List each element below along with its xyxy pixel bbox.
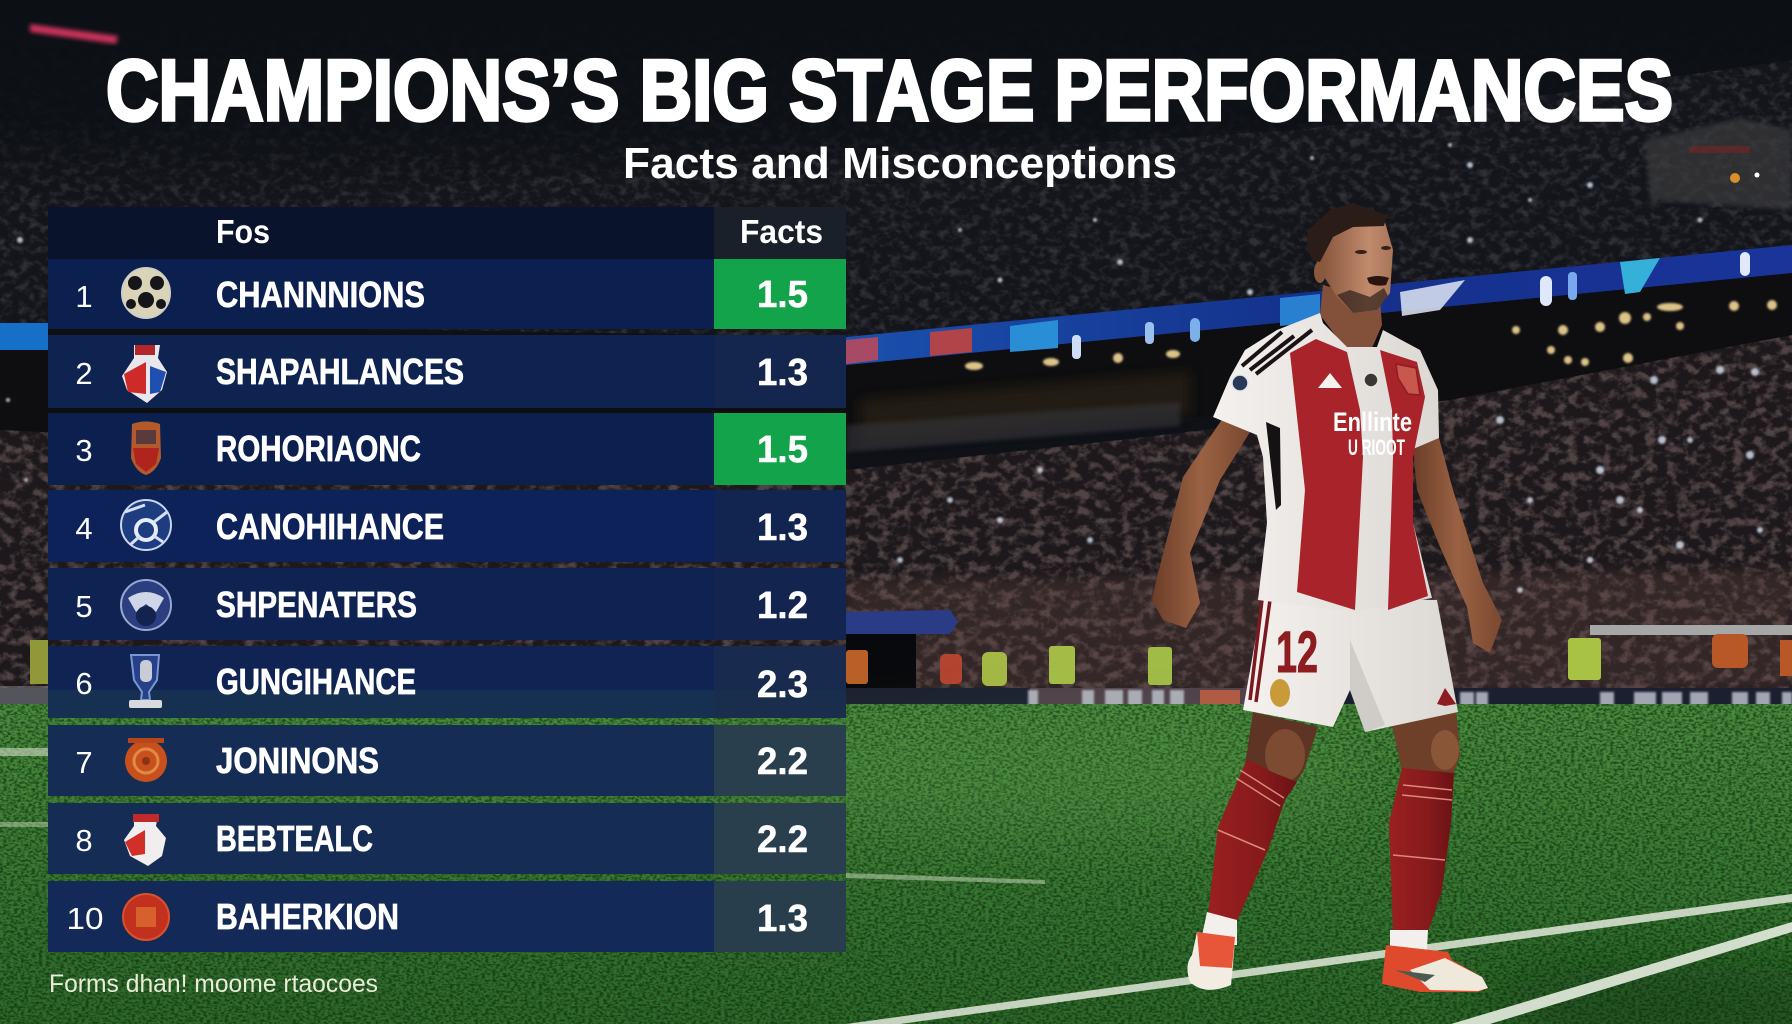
- rank 7: 7: [75, 745, 93, 780]
- rank 1: 1: [75, 279, 93, 314]
- row 7: [48, 725, 846, 796]
- value: 2.3: [757, 664, 808, 706]
- name: CANOHIHANCE: [216, 506, 444, 547]
- club crest: [1396, 364, 1420, 395]
- right leg: [1382, 708, 1488, 992]
- rank 10: 10: [66, 901, 104, 936]
- rank 4: 4: [75, 511, 93, 546]
- icon: red and white crest: [124, 814, 166, 866]
- rank 2: 2: [75, 356, 93, 391]
- row 3: [48, 413, 846, 485]
- side bar and tunnel: [846, 610, 1792, 696]
- lower crowd: [0, 335, 1792, 705]
- icon: red and blue crest: [122, 345, 167, 403]
- roof lights: [965, 300, 1777, 370]
- name: CHANNNIONS: [216, 274, 425, 315]
- jersey badge: [1364, 373, 1378, 387]
- value: 1.3: [757, 352, 808, 394]
- icon: black and white ball crest: [122, 268, 170, 318]
- upper crowd: [0, 0, 1792, 337]
- jersey: [1213, 313, 1439, 612]
- row 10: [48, 881, 846, 952]
- value: 1.2: [757, 585, 808, 627]
- pitch: [0, 704, 1792, 1024]
- adidas logo: [1318, 373, 1342, 388]
- row 5: [48, 568, 846, 640]
- standings table: [48, 207, 846, 952]
- right arm: [1413, 438, 1502, 653]
- icon: orange red shield: [131, 422, 161, 475]
- value: 2.2: [757, 819, 808, 861]
- rank 8: 8: [75, 823, 93, 858]
- header: Facts: Facts: [740, 213, 823, 250]
- head: [1307, 203, 1393, 313]
- rank 3: 3: [75, 433, 93, 468]
- row 1: [48, 259, 846, 329]
- footnote: Forms dhan! moome rtaocoes: [49, 970, 378, 998]
- row 6: [48, 646, 846, 718]
- name: GUNGIHANCE: [216, 661, 416, 702]
- icon: trophy: [129, 655, 162, 708]
- footballer in red and white kit: [1152, 203, 1502, 992]
- value: 1.5: [757, 429, 808, 471]
- header: Fos: Fos: [216, 213, 270, 250]
- shorts crest: [1270, 679, 1290, 707]
- row 8: [48, 803, 846, 874]
- header row: [48, 207, 846, 259]
- icon: blue starball: [121, 500, 171, 550]
- roof underside: [0, 273, 1792, 450]
- name: JONINONS: [216, 740, 379, 781]
- rank 5: 5: [75, 589, 93, 624]
- row 2: [48, 335, 846, 408]
- name: SHPENATERS: [216, 584, 417, 625]
- name: ROHORIAONC: [216, 428, 421, 469]
- crowd flash lights: [6, 143, 1763, 593]
- shorts: [1243, 597, 1458, 732]
- name: BEBTEALC: [216, 818, 373, 859]
- row 4: [48, 490, 846, 562]
- icon: silver globe crest: [121, 580, 171, 630]
- value: 1.3: [757, 898, 808, 940]
- jersey sponsor: Enllinte: [1333, 407, 1412, 437]
- name: BAHERKION: [216, 896, 399, 937]
- left leg: [1187, 712, 1318, 990]
- top-left pink light: [30, 24, 118, 44]
- LED ribbon: [0, 245, 1792, 365]
- value: 1.3: [757, 507, 808, 549]
- jersey: U RIOOT: [1348, 435, 1405, 460]
- neck: [1320, 285, 1382, 348]
- value: 2.2: [757, 741, 808, 783]
- advertising boards: [0, 686, 1792, 712]
- value: 1.5: [757, 274, 808, 316]
- icon: red round crest: [123, 894, 169, 940]
- name: SHAPAHLANCES: [216, 351, 464, 392]
- shorts number 12: 12: [1276, 620, 1318, 685]
- icon: orange rose crest: [125, 738, 167, 782]
- stewards in hi-vis: [30, 634, 1792, 686]
- rank 6: 6: [75, 666, 93, 701]
- left arm: [1152, 418, 1250, 628]
- subtitle: Facts and Misconceptions: [623, 139, 1177, 188]
